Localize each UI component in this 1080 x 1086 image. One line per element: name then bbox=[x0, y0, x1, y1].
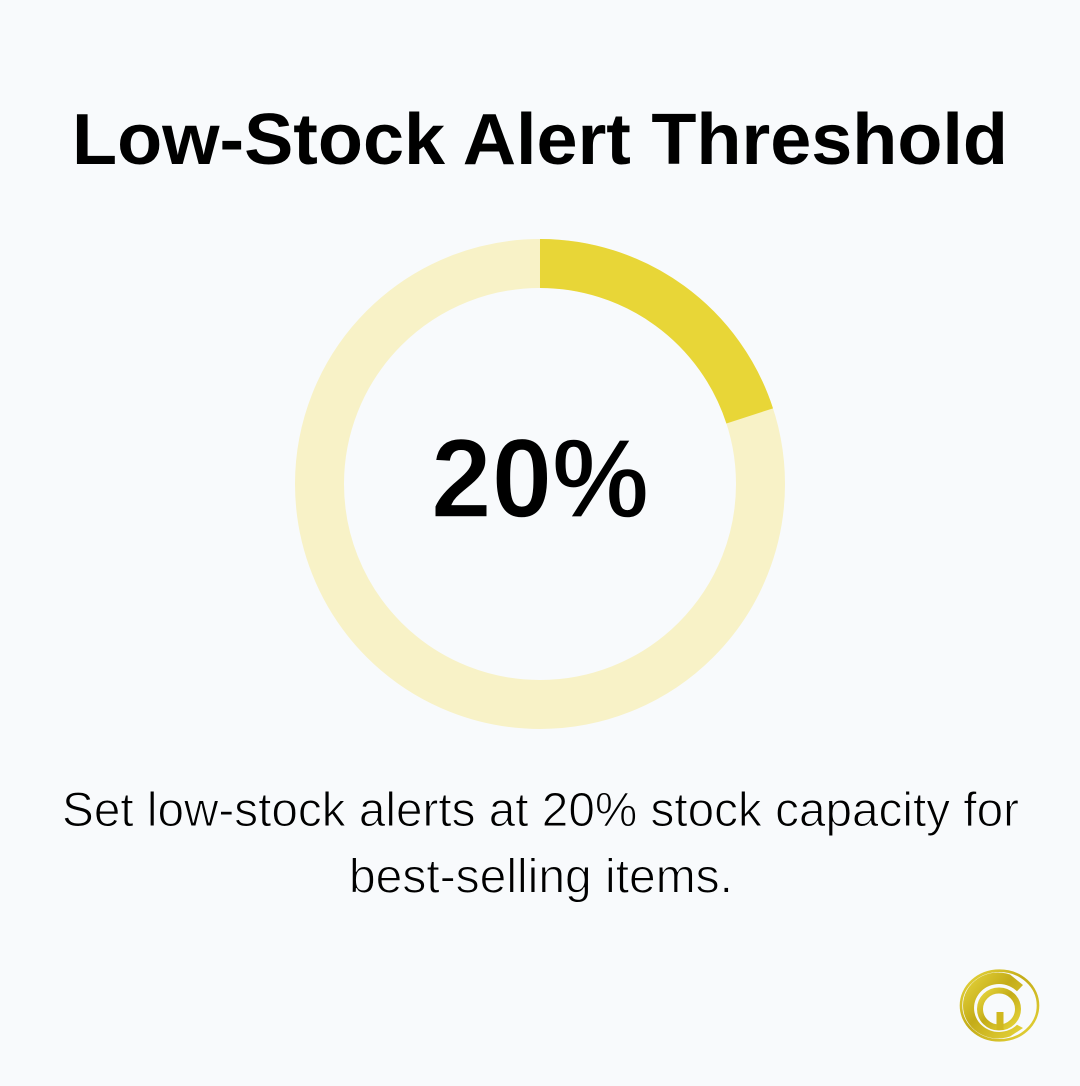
caption bbox=[62, 784, 1019, 904]
logo outer ring bbox=[961, 971, 1038, 1040]
logo C shape bbox=[963, 972, 1023, 1038]
caption line 1: Set low-stock alerts at 20% stock capacity for bbox=[62, 784, 1019, 837]
donut chart bbox=[320, 264, 760, 704]
caption line 2: best-selling items. bbox=[349, 850, 733, 904]
donut track: remaining 80% bbox=[320, 264, 760, 704]
logo Q stem bbox=[996, 1012, 1004, 1030]
logo Q ring bbox=[980, 990, 1018, 1028]
center value: 20% bbox=[431, 416, 649, 541]
donut segment: 20% bbox=[540, 264, 750, 416]
icon: gold Q logo bbox=[961, 971, 1038, 1040]
title: Low-Stock Alert Threshold bbox=[72, 100, 1008, 180]
